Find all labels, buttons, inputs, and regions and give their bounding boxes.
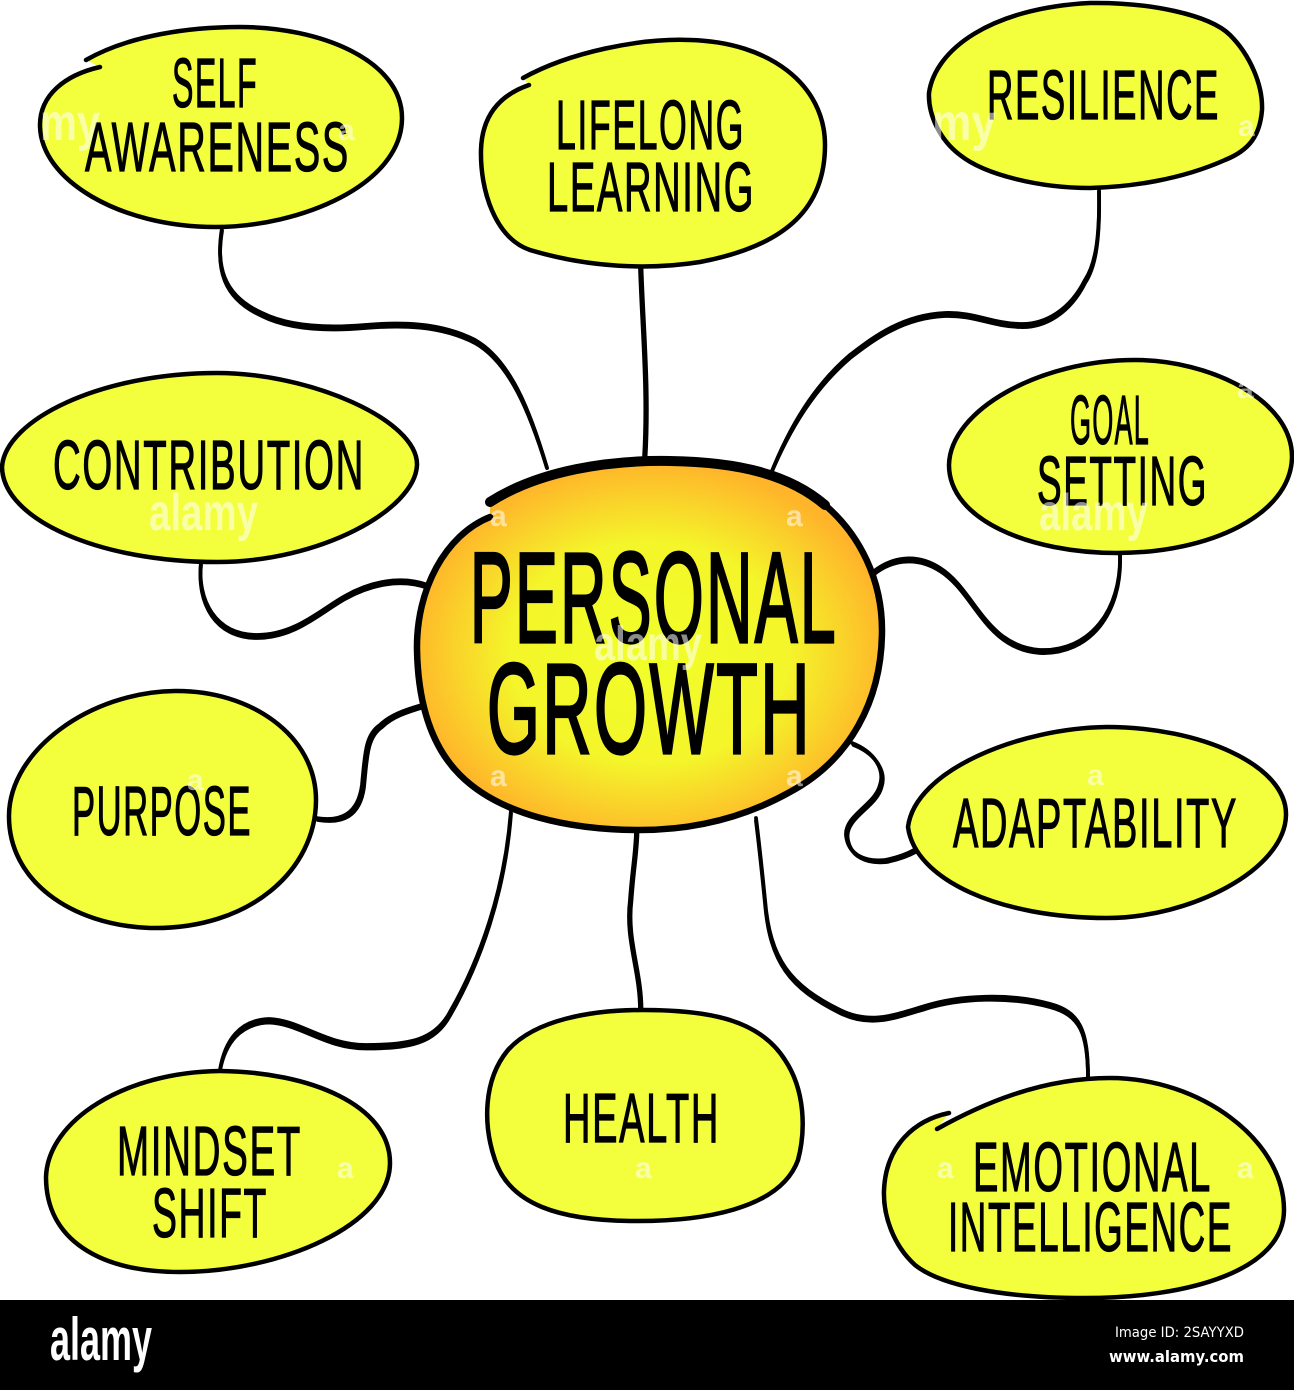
node: health xyxy=(487,1010,803,1221)
watermarks: my xyxy=(40,94,100,152)
connector: goal setting xyxy=(873,553,1120,653)
footer logo: alamy: alamy xyxy=(50,1306,152,1373)
node: health: HEALTH xyxy=(563,1079,720,1157)
watermarks: a xyxy=(937,1152,954,1185)
watermarks: a xyxy=(1237,1152,1254,1185)
node: lifelong learning: LIFELONG xyxy=(556,86,745,164)
node: contribution: CONTRIBUTION xyxy=(53,426,365,504)
node: self awareness: AWARENESS xyxy=(85,108,350,186)
watermarks: a xyxy=(337,1152,354,1185)
connector: purpose xyxy=(316,705,424,821)
node: mindset shift: MINDSET xyxy=(117,1112,302,1190)
connector: contribution xyxy=(200,562,428,638)
node: lifelong learning xyxy=(481,40,825,266)
connector: self awareness xyxy=(220,228,547,468)
watermarks: a xyxy=(786,500,803,533)
watermarks: a xyxy=(1237,372,1254,405)
footer: image id: Image ID: 2SAYYXD xyxy=(1115,1325,1244,1341)
watermarks: a xyxy=(1087,759,1104,792)
watermarks xyxy=(40,94,1255,1185)
node: mindset shift xyxy=(46,1071,390,1272)
footer: website: www.alamy.com xyxy=(1109,1347,1244,1366)
watermarks: my xyxy=(932,94,996,152)
node: contribution xyxy=(2,373,417,562)
node: emotional intelligence xyxy=(884,1078,1284,1298)
footer bar xyxy=(0,1300,1294,1390)
node: lifelong learning: LEARNING xyxy=(547,148,755,226)
central node: personal growth xyxy=(417,461,882,830)
watermarks: a xyxy=(1238,110,1255,143)
connector: adaptability xyxy=(846,743,916,862)
connector: mindset shift xyxy=(220,810,511,1070)
node: mindset shift: SHIFT xyxy=(152,1174,268,1252)
watermarks: a xyxy=(490,760,507,793)
watermarks: a xyxy=(635,1152,652,1185)
watermarks: a xyxy=(338,114,355,147)
watermarks: alamy xyxy=(594,618,702,671)
node: purpose: PURPOSE xyxy=(72,772,252,850)
central node: personal growth: PERSONAL xyxy=(470,527,838,670)
node: resilience xyxy=(929,3,1262,188)
node: self awareness: SELF xyxy=(172,44,258,122)
watermarks: a xyxy=(786,760,803,793)
connector: health xyxy=(629,830,642,1010)
connector: lifelong learning xyxy=(640,268,647,458)
connector: resilience xyxy=(770,189,1099,476)
node: goal setting: GOAL xyxy=(1070,381,1150,459)
node: adaptability xyxy=(908,727,1286,918)
node: goal setting xyxy=(949,360,1292,553)
watermarks: alamy xyxy=(149,484,258,542)
node: purpose xyxy=(9,691,316,928)
watermarks: alamy xyxy=(1039,484,1148,542)
watermarks: a xyxy=(490,500,507,533)
central node: personal growth: GROWTH xyxy=(487,638,812,781)
watermarks: a xyxy=(187,764,204,797)
node: self awareness xyxy=(40,27,402,227)
connector: emotional intelligence xyxy=(756,818,1088,1078)
